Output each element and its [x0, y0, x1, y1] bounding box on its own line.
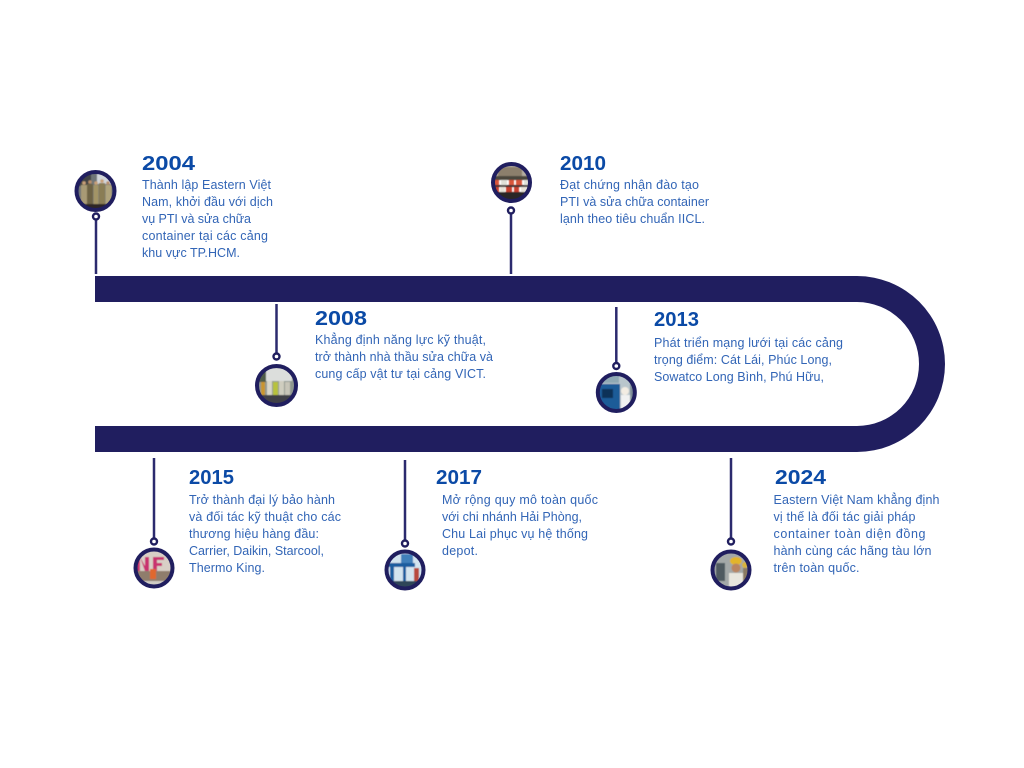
description 2015: và đối tác kỹ thuật cho các: [189, 510, 341, 524]
description 2004: Thành lập Eastern Việt: [142, 178, 272, 192]
photo 2008: crew beside truck: [257, 366, 297, 406]
description 2024: vị thế là đối tác giải pháp: [774, 510, 916, 524]
milestone 2024: [711, 458, 940, 590]
year 2010: 2010: [560, 153, 606, 175]
description 2010: lạnh theo tiêu chuẩn IICL.: [560, 212, 705, 226]
description 2013: Sowatco Long Bình, Phú Hữu,: [654, 370, 824, 384]
connector 2008: [274, 304, 280, 360]
photo 2013: technician at blue container unit: [597, 373, 637, 413]
milestone 2008: [257, 304, 493, 406]
description 2004: vụ PTI và sửa chữa: [142, 212, 251, 226]
photo 2010: group photo in red shirts: [492, 163, 532, 203]
year 2017: 2017: [436, 467, 482, 489]
description 2015: [189, 493, 341, 575]
milestone 2004: [76, 153, 273, 274]
connector 2015: [151, 458, 157, 544]
connector 2017: [402, 460, 408, 546]
year 2004: 2004: [142, 153, 196, 175]
description 2008: cung cấp vật tư tại cảng VICT.: [315, 367, 486, 381]
year 2008: 2008: [315, 308, 367, 330]
description 2008: [315, 332, 493, 381]
photo 2004: team of five technicians: [76, 172, 116, 212]
description 2017: Chu Lai phục vụ hệ thống: [442, 527, 588, 541]
description 2024: Eastern Việt Nam khẳng định: [774, 492, 940, 507]
description 2024: [774, 492, 940, 575]
description 2024: hành cùng các hãng tàu lớn: [774, 544, 932, 558]
description 2015: Thermo King.: [189, 561, 265, 575]
timeline track: U-shaped road: [95, 276, 945, 452]
description 2010: Đạt chứng nhận đào tạo: [560, 178, 699, 192]
year 2015: 2015: [189, 467, 234, 489]
description 2013: [654, 336, 843, 384]
description 2008: trở thành nhà thầu sửa chữa và: [315, 350, 493, 364]
milestone 2010: [492, 153, 709, 274]
description 2010: PTI và sửa chữa container: [560, 195, 709, 209]
photo 2024: technicians in yellow helmets: [711, 550, 751, 590]
milestone 2017: [385, 460, 598, 590]
description 2013: trọng điểm: Cát Lái, Phúc Long,: [654, 353, 832, 367]
photo 2017: blue port crane at depot: [385, 550, 425, 590]
description 2015: thương hiệu hàng đầu:: [189, 527, 319, 541]
connector 2013: [613, 307, 619, 369]
milestone 2015: [134, 458, 341, 588]
description 2013: Phát triển mạng lưới tại các cảng: [654, 336, 843, 350]
year 2013: 2013: [654, 309, 699, 331]
description 2008: Khẳng định năng lực kỹ thuật,: [315, 332, 486, 347]
description 2017: [442, 493, 598, 558]
connector 2004: [93, 214, 99, 274]
description 2017: depot.: [442, 544, 478, 558]
description 2015: Carrier, Daikin, Starcool,: [189, 544, 324, 558]
description 2017: với chi nhánh Hải Phòng,: [442, 510, 582, 524]
description 2004: container tại các cảng: [142, 229, 268, 243]
connector 2024: [728, 458, 734, 544]
description 2017: Mở rộng quy mô toàn quốc: [442, 493, 598, 507]
description 2004: [142, 178, 273, 260]
description 2015: Trở thành đại lý bảo hành: [189, 493, 335, 507]
description 2024: container toàn diện đồng: [774, 527, 926, 541]
photo 2015: group under pink sign: [134, 548, 174, 588]
milestone 2013: [597, 307, 843, 413]
description 2004: khu vực TP.HCM.: [142, 246, 240, 260]
description 2010: [560, 178, 709, 226]
year 2024: 2024: [775, 467, 827, 489]
description 2004: Nam, khởi đầu với dịch: [142, 195, 273, 209]
connector 2010: [508, 208, 514, 274]
description 2024: trên toàn quốc.: [774, 561, 860, 575]
